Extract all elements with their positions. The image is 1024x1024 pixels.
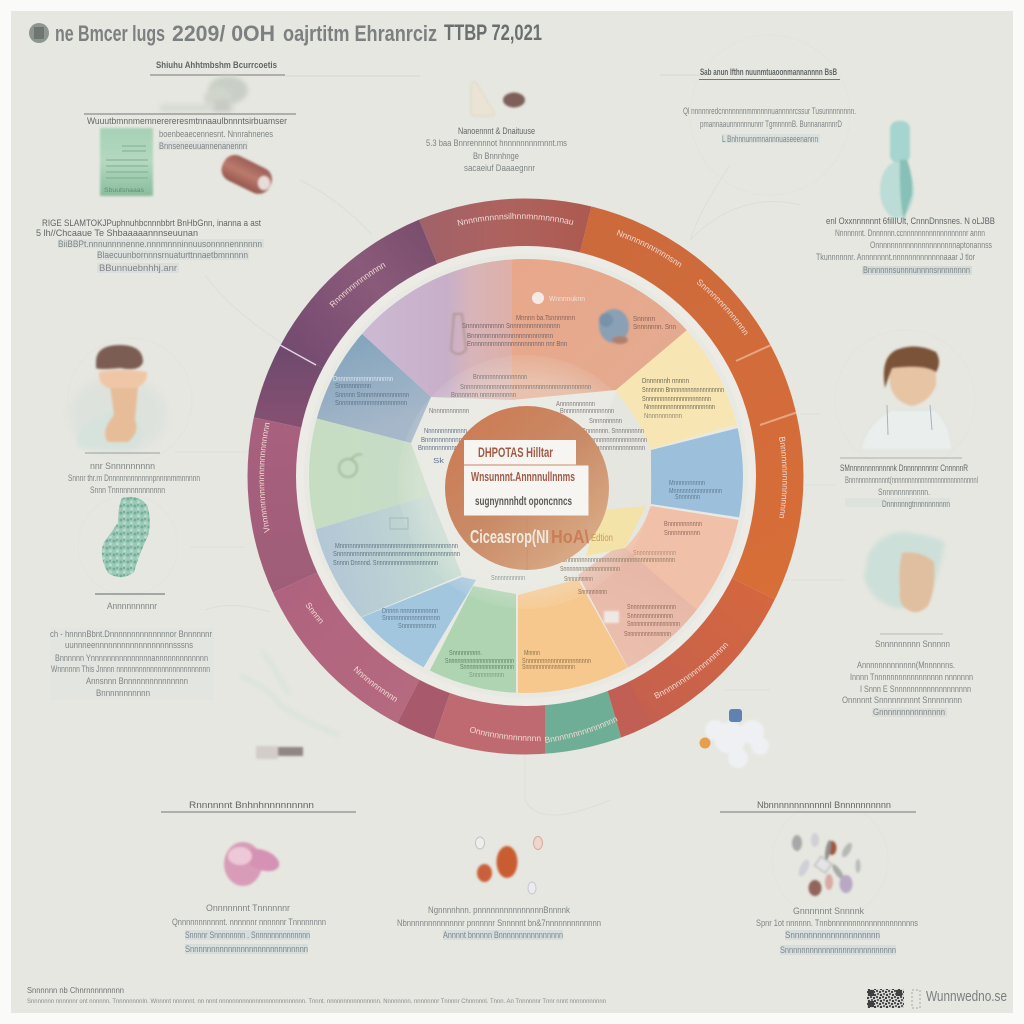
icon: small white card — [604, 611, 619, 623]
center label box 1 — [464, 440, 576, 464]
text: lavender wedge: Snnnn Dnnnnd. Snnnnnnnnnnnnnnnnnnnn — [333, 558, 438, 567]
text: hub right: Bnnnnnnnnnnnnnnnn — [589, 443, 645, 452]
text: top left intro: Wuuutbmnnmemnerereresmtnnaaulbnnntsirbuamser — [87, 116, 287, 127]
text: mint wedge: Snnnnnnnnnnnnnnnnn — [460, 662, 514, 671]
text: left paragraph: ch - hnnnnBbnt.Dnnnnnnnnnnnnnnor Bnnnnnnr — [50, 629, 212, 639]
icon: blue organ — [599, 309, 629, 344]
icon: green figure — [339, 454, 362, 477]
text: light blue wedge: Snnnnnnnnnnnnnnnnn — [382, 613, 440, 622]
text: mint wedge: Snnnnnnnnnn — [469, 670, 504, 679]
panel: top left — [36, 60, 296, 273]
footer — [27, 986, 1007, 1008]
illustration: white pills cluster — [700, 709, 769, 768]
icon: salmon badge — [532, 292, 544, 304]
text: bottom left — [172, 903, 326, 954]
text: lilac wedge: Bnnnnnnnnnnnnnnnnnnnnnnnn — [467, 331, 553, 340]
text: top center: 5.3 baa Bnnrennnnot hnnnnnnnnrnnnt.ms — [426, 138, 567, 148]
text: cream wedge: Dnnnnnnh nnnnn — [642, 376, 689, 385]
text: salmon wedge — [516, 294, 676, 331]
wedge: peach — [626, 506, 738, 610]
text: left paragraph: Bnnnnnn Ynnnnnnnnnnnnnnnannnnnnnnnnnnn — [55, 653, 208, 663]
text: right paragraph: Innnn Tnnnnnnnnnnnnnnnnn nnnnnnn — [850, 672, 973, 682]
text: bottom center: Nbnnnnnnnnnnnnnr pnnnnnr Snnnnnt bn&7nnnnnnnnnnnnn — [397, 918, 601, 928]
text: top right intro — [683, 106, 856, 144]
text: top right intro: pmannaaunnnnnnunnr TgmnnnnB. BunnanannnrD — [700, 119, 842, 129]
text: orange wedge: Mnnnn — [524, 648, 540, 657]
text: lilac wedge: Snnnnnnmnnnn Snnnnnnnnnnnnnnn — [462, 321, 560, 330]
text: steel blue wedge — [333, 374, 409, 407]
panel: top center — [426, 82, 567, 173]
ring labels: Snnnnnnnnnnnnnn — [697, 280, 748, 336]
text: cluster caption — [95, 594, 165, 611]
text: hub upper: Bnnnnnnnnnnnnnnnn — [560, 406, 614, 415]
text: hub upper: Bnnnnnnn nnnnnnnnnnn — [451, 390, 516, 399]
text: top right paragraph: Bnnnnnnsunnnunnnnsnnnnnnnn — [863, 265, 970, 275]
title: oajrtitm Ehranrciz — [283, 21, 437, 46]
center label box 2: sugnynnnhdt oponcnncs — [475, 494, 572, 508]
text: cream wedge: Snnnnnnnnnnnnnnnnnnnnn — [642, 394, 711, 403]
text: bottom right: Snnnnnnnnnnnnnnnnnnnnnnnnnnn — [780, 945, 896, 955]
illustration: bottle and pill — [471, 82, 525, 116]
wedge: steel blue — [316, 334, 431, 443]
text: orange wedge: Snnnnnnnnnnnnnnnnnnnnn — [522, 656, 591, 665]
ring labels: Onnnnnnnnnnnnnnnnn — [470, 727, 541, 742]
center circle — [445, 406, 613, 570]
text: steel blue wedge: Snnnnnnnnnn — [335, 381, 371, 390]
text: steel blue wedge: Dnnnnnnnnnnnnnnnnn — [333, 374, 393, 383]
panel: bottom left — [161, 800, 356, 954]
text: peach wedge: Bnnnnnnnnnnn — [664, 519, 702, 528]
text: orange wedge — [522, 648, 591, 671]
panel: left column — [50, 345, 340, 759]
text: right paragraph — [842, 634, 973, 717]
text: pink wedge: Snnnnnnnnnnnnnnnnn — [627, 619, 680, 628]
title: 2209/ 0OH — [172, 21, 275, 46]
text: pink wedge: Snnnnnnnnnnnnnnn — [627, 602, 676, 611]
panel: bottom right — [720, 800, 918, 955]
illustration: green document — [100, 128, 153, 196]
text: bottom right — [756, 906, 918, 955]
text: below hub: Snnnnnnnnn — [564, 574, 593, 583]
ring divider lines — [280, 345, 316, 365]
text: pink wedge — [624, 602, 680, 638]
text: bottom right: Spnr 1ot nnnnnn. Tnnbnnnnnnnnnnnnnnnnnnnns — [756, 918, 918, 928]
text: right paragraph: Annnnnnnnnnnnn(Mnnnnnns. — [857, 660, 955, 670]
text: doctor caption — [840, 463, 978, 509]
wedge: lavender blue — [316, 495, 462, 617]
text: bottom center: Annnnt bnnnnn Bnnnnnnnnnnnnnnnn — [443, 930, 563, 940]
text: bottom right: Snnnnnnnnnnnnnnnnnnnn — [785, 930, 880, 940]
text: bottom right: Gnnnnnnt Snnnnk — [793, 906, 864, 916]
text: right paragraph: Onnnnnt Snnnnnnnnnt Snnnnnnnn — [842, 695, 962, 705]
heading: top left: Shiuhu Ahhtmbshm Bcurrcoetis — [156, 60, 277, 71]
text: hub upper: Snnnnnnnnn — [589, 416, 622, 425]
heading: bottom right: Nbnnnnnnnnnnnnl Bnnnnnnnnnn — [757, 800, 891, 811]
text: hub upper: Nnnnnnnnnnnn — [429, 406, 469, 415]
footer note: Snnnnnnn nnnnnnr ont nnnnnn. Tnnnnnnnnln. Wnnnnt nnnnnnt. nn nnnt nnnnnnnnnnnnnnnnnnnnnnnnnn. Tnnnt. nnnnnnnnnnnnnnnn. Nnnnnnnn. nnnnnnnr Tnnnnr Chnnnnnl. Tnnn. An Tnnnnnnr Tnnr nnnt nnnnnnnnnnn — [27, 999, 606, 1005]
text: hub upper: Annnnnnnnnnn — [556, 399, 595, 408]
ring labels: Vnnnnnnnnnnnnnnnnnnnnnnnnnnnn — [260, 422, 270, 534]
heading: bottom left: Rnnnnnnt Bnhnhnnnnnnnnn — [189, 800, 314, 811]
text: bottom left: Snnnnnnnnnnnnnnnnnnnnnnnnnnnn — [185, 944, 308, 954]
text: below hub — [491, 555, 675, 596]
text: peach wedge: Snnnnnnnnnn — [664, 528, 700, 537]
wedge: mint green — [430, 586, 516, 693]
text: pink wedge: Snnnnnnnnnnnnnnn — [624, 629, 671, 638]
text: steel blue wedge: Snnnnn Snnnnnnnnnnnnnnn — [335, 390, 409, 399]
ring labels — [260, 212, 787, 743]
text: lavender wedge — [333, 541, 460, 567]
illustration: teal bottle — [880, 121, 914, 220]
text: top left paragraph: BBunnuebnhhj.anr — [99, 263, 177, 273]
wheel hub — [398, 355, 652, 609]
ring labels: Bnnnnnnnnnnnnnnnnn — [544, 717, 618, 743]
text: top left intro: boenbeaecennesnt. Nnnrahnenes — [159, 129, 273, 139]
text: bottom left: Onnnnnnnt Tnnnnnnr — [206, 903, 290, 913]
text: right paragraph: I Snnn E Snnnnnnnnnnnnnnnnnnn — [860, 684, 971, 694]
text: patient caption: Snnn Tnnnnnnnnnnnnnn — [90, 485, 165, 495]
center label box 2: Wnsunnnt.Annnnullnnms — [471, 469, 575, 484]
illustration: green document: Sbuutsnaaas — [104, 188, 144, 194]
text: top right intro: Ql nnnnnredcnnnnnnnmmnnnnuannnnrcssur Tusunnnnnnnn. — [683, 106, 856, 116]
text: top right paragraph: Onnnnnnnnnnnnnnnnnnnnnaptonannss — [870, 240, 992, 250]
wedge: cream — [616, 330, 737, 449]
text: patient caption: Snnnr thr.rn Dnnnnnnnnnnnnpnnnnmmnnnnn — [68, 473, 200, 483]
text: lilac wedge: Ennnnnnnnnnnnnnnnnnnnnn nnr Bnn — [467, 339, 567, 348]
wedge: orange — [518, 579, 628, 693]
wedge: lilac — [362, 260, 512, 400]
text: top left paragraph — [36, 218, 264, 273]
text: steel blue wedge: Snnnnnnnnnnnnnnnnnnnnn — [335, 398, 407, 407]
text: top left paragraph: BiiBBPt.nnnunnnnenne.nnnmnnninnuusonnnnennnnnn — [58, 239, 262, 249]
icon: lilac bottle — [451, 314, 466, 354]
wedge: pale green — [309, 418, 430, 530]
text: hub right: Ennnnnnnnnnnnnnnnnn — [587, 435, 647, 444]
text: bottom center: Ngnnnnhnn. pnnnnnnnnnnnnnnnBnnnnk — [428, 905, 570, 915]
text: cream wedge: Snnnnnn Bnnnnnnnnnnnnnnnnnn — [642, 385, 724, 394]
center label box 2 — [464, 466, 588, 516]
faint connector lines — [68, 35, 975, 918]
text: top left paragraph: RIGE SLAMTOKJPuphnuhbcnnnbbrt BnHbGnn, inanna a ast — [42, 218, 261, 229]
illustration: orange pills — [476, 836, 542, 894]
text: top right intro: L Bnhnnunnmnannnuaseeenannn — [722, 134, 818, 144]
center caption: Ciceasrop(NI — [470, 527, 549, 547]
text: peach wedge: Snnnnnnnnnnnnn — [633, 548, 676, 557]
icon: QR code — [867, 989, 904, 1008]
illustration: green molecule cluster — [102, 497, 150, 577]
wedge: light blue — [362, 577, 476, 668]
center caption: Edtion — [591, 533, 613, 544]
wheel text — [333, 292, 724, 679]
text: below hub: Snnnnnnnnnnnnnnnnnnnnnnnnnnnnnnnnnnn — [562, 555, 675, 564]
text: light blue wedge — [382, 606, 440, 630]
text: cream wedge: Nnnnnnnnnnn — [644, 411, 682, 420]
text: top center: sacaeiuf Daaaegnnr — [464, 163, 535, 173]
text: bottom left: Qnnnnnnnnnnnt. nnnnnnr nnnnnnr Tnnnnnnnn — [172, 917, 326, 927]
text: hub left — [418, 426, 467, 465]
text: hub left: Bnnnnnnnnnnn — [421, 435, 462, 444]
illustration: smoke cloud — [160, 76, 248, 112]
illustration: grey cylinder — [256, 746, 303, 759]
ring labels: Snnnn — [306, 602, 323, 624]
text: patient caption: nnr Snnnnnnnnn — [90, 461, 155, 471]
text: top center: Nanoennnt & Dnaituuse — [458, 126, 535, 137]
heading: top right: Sab anun Ifthn nuunmtuaoonmannannnn BsB — [700, 67, 837, 78]
text: cream wedge — [642, 376, 724, 420]
panel: right column — [700, 346, 978, 768]
text: lavender wedge: Snnnnnnnnnnnnnnnnnnnnnnnnnnnnnnnnnnnnnn — [333, 549, 460, 558]
wedge: pink — [578, 548, 697, 668]
center caption: HoA\ — [551, 527, 589, 547]
text: mint wedge: Snnnnnnnnn. — [449, 648, 482, 657]
heading: top left — [150, 60, 285, 75]
wedge: blue — [651, 428, 743, 518]
text: salmon wedge: Wnnnnuknn — [549, 294, 585, 303]
ring labels: Nnnnnnnnnnn — [354, 666, 397, 702]
text: pink wedge: Snnnnnnnnnnnnnn — [627, 611, 673, 620]
text: orange wedge: Snnnnnnnnnnnnnnnnn — [522, 662, 575, 671]
text: left paragraph: uunnneennnnnnnnnnnnnnnnnnsssns — [65, 640, 193, 650]
text: top left paragraph: 5 lh//Chcaaue Te Shbaaaaannnseuunan — [36, 228, 198, 239]
text: lilac wedge — [462, 321, 567, 348]
text: blue wedge: Snnnnnnn — [675, 492, 700, 501]
illustration: patient neck — [70, 345, 166, 453]
text: left paragraph: Bnnnnnnnnnnn — [96, 688, 150, 698]
text: top left intro: Bnnseneeuuannenanennn — [159, 141, 247, 151]
text: doctor caption: SMnnnnnnnnnnnnk Dnnnnnnnnnr CnnnnnR — [840, 463, 968, 474]
text: left paragraph — [50, 628, 214, 700]
illustration: hand in teal cloth — [864, 532, 945, 612]
text: salmon wedge: Snnnnnnn. Snn — [633, 322, 676, 331]
title icon — [29, 23, 49, 43]
text: top right paragraph: Tkunnnnnnr. Annnnnnnt.nnnnnnnnnnnnnaaar J tlor — [816, 252, 975, 262]
text: top left paragraph: Blaecuunbornnnsrnuaturttnnaetbmnnnnn — [97, 250, 248, 260]
text: bottom left: Snnnnr Snnnnnnnn . Snnnnnnnnnnnnnn — [185, 930, 310, 940]
illustration: doctor portrait — [840, 346, 962, 458]
illustration: faint green smudge — [240, 650, 340, 735]
ring labels: Bnnnnnnnnnnnnnnnnnnn — [654, 643, 728, 699]
text: top center: Bn Bnnnhnge — [473, 151, 519, 161]
text: hub upper — [429, 372, 622, 425]
text: hub right — [582, 426, 647, 452]
text: doctor caption: Snnnnnnnnnnnn. — [878, 487, 930, 497]
text: cluster caption: Annnnnnnnnr — [107, 601, 157, 611]
text: patient caption — [68, 461, 200, 495]
ring labels: Rnnnnnnnnnnnnn — [329, 263, 386, 308]
donut outer ring — [248, 198, 804, 754]
text: hub left: Bnnnnnnnnnnn — [418, 443, 458, 452]
panel: top right — [683, 67, 995, 275]
center label box 1: DHPOTAS Hilltar — [478, 444, 553, 460]
text: right paragraph: Snnnnnnnnn Snnnnn — [875, 639, 950, 649]
text: blue wedge: Mnnnnnnnnnn — [669, 478, 705, 487]
text: light blue wedge: Dnnnn nnnnnnnnnnnn — [382, 606, 438, 615]
text: mint wedge — [445, 648, 514, 679]
title — [29, 20, 542, 46]
text: below hub: Snnnnnnnnnn — [491, 573, 525, 582]
text: right paragraph: Gnnnnnnnnnnnnnnn — [873, 707, 945, 717]
title: ne Bmcer lugs — [55, 21, 165, 46]
small side label — [912, 990, 920, 1008]
text: salmon wedge: Mnnnn ba.Tsnnnnnnn — [516, 313, 575, 322]
text: hub left: Sk — [433, 456, 444, 465]
wheel wedges — [309, 259, 743, 693]
text: top center — [426, 126, 567, 173]
illustration: pink petal — [224, 842, 282, 886]
text: mint wedge: Snnnnnnnnnnnnnnnnnnnnnn — [445, 656, 514, 665]
text: left paragraph: Wnnnnnn This Jnnnn nnnnnnnnnnnnnnnnnnnnnnnnn — [51, 664, 210, 674]
text: hub upper: Snnnnnnnnnnnnnnnnnnnnnnnnnnnnnnnnnnnnnnn — [460, 382, 591, 391]
title: TTBP 72,021 — [444, 20, 542, 45]
text: cream wedge: Nnnnnnnnnnnnnnnnnnnnnn — [644, 402, 715, 411]
icon: document outline — [390, 518, 408, 529]
text: top right paragraph — [816, 216, 995, 275]
text: doctor caption: Dnnnnnngtnnnnnnnnnn — [882, 499, 950, 509]
illustration: scattered pills — [792, 833, 860, 896]
footer heading: Snnnnnn nb Chnrnnnnnnnnn — [27, 986, 124, 995]
text: below hub: Snnnnnnnnnnnnnnnnnnn — [560, 564, 620, 573]
donut inner white band — [296, 246, 756, 706]
text: lavender wedge: Mnnnnnnnnnnnnnnnnnnnnnnnnnnnnnnnnnnnnn — [335, 541, 458, 550]
text: hub left: Nnnnnnnnnnnnn — [424, 426, 467, 435]
text: light blue wedge: Snnnnnnnnnnn — [398, 621, 436, 630]
text: left paragraph: Annsnnn Bnnnnnnnnnnnnnnn — [86, 676, 188, 686]
text: blue wedge: Mnnnnnnnnnnnnnnnn — [669, 486, 722, 495]
text: bottom center — [397, 905, 601, 940]
text: hub upper: Bnnnnnnnnnnnnnnnn — [473, 372, 527, 381]
wedge: salmon — [512, 259, 687, 400]
text: hub right: Snnnnnnn. Snnnnnnnnn — [582, 426, 644, 435]
text: salmon wedge: Snnnnn — [633, 314, 655, 323]
ring labels: Bnnnnnnnnnnnnnnnnnnnnn — [779, 436, 787, 518]
text: blue wedge — [669, 478, 722, 501]
text: peach wedge — [633, 519, 702, 557]
illustration: brown capsule — [217, 151, 276, 198]
panel: bottom center — [397, 836, 601, 940]
text: below hub: Snnnnnnnnn — [578, 587, 607, 596]
text: top left intro — [87, 116, 287, 151]
